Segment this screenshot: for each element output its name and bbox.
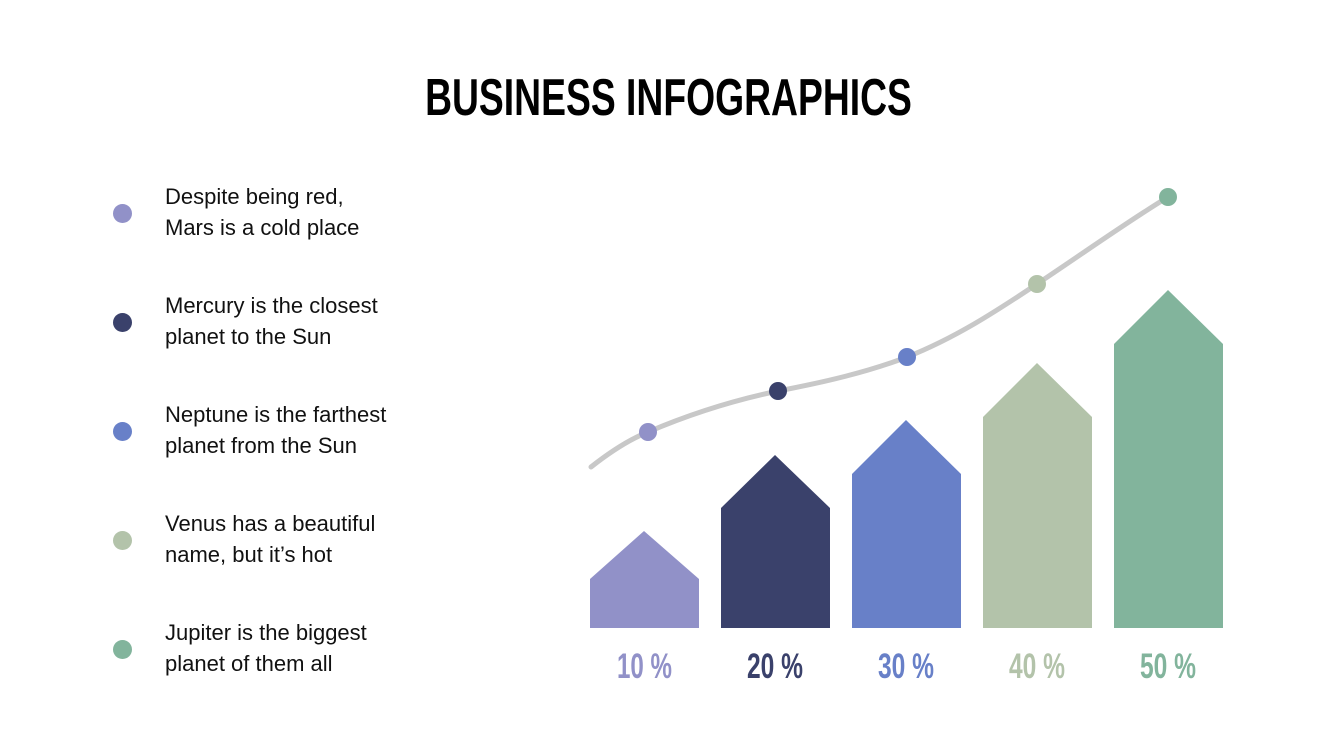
legend item: Jupiter: planet of them all <box>165 651 333 676</box>
arrow bar 30% <box>852 420 961 628</box>
legend item: Mercury <box>113 293 378 349</box>
legend item: Venus: name, but it’s hot <box>165 542 332 567</box>
arrow bar 10% <box>590 531 699 628</box>
legend item: Neptune: Neptune is the farthest <box>165 402 386 427</box>
trend curve <box>591 197 1168 467</box>
legend item: Jupiter: Jupiter is the biggest <box>165 620 367 645</box>
legend item: Mars: Despite being red, <box>165 184 344 209</box>
title: BUSINESS INFOGRAPHICS <box>425 69 911 127</box>
percentage labels: 50 % <box>1140 647 1196 686</box>
legend item: Mercury: Mercury is the closest <box>165 293 378 318</box>
legend item: Neptune: planet from the Sun <box>165 433 357 458</box>
legend item: Neptune <box>113 402 386 458</box>
arrow bar 50% <box>1114 290 1223 628</box>
legend item: Venus <box>113 511 375 567</box>
arrow bar 40% <box>983 363 1092 628</box>
percentage labels: 20 % <box>747 647 803 686</box>
percentage labels <box>617 647 1196 686</box>
arrow bar 20% <box>721 455 830 628</box>
percentage labels: 30 % <box>878 647 934 686</box>
legend item: Venus: Venus has a beautiful <box>165 511 375 536</box>
curve points <box>639 188 1177 441</box>
legend item: Mercury: planet to the Sun <box>165 324 331 349</box>
legend item: Jupiter <box>113 620 367 676</box>
percentage labels: 40 % <box>1009 647 1065 686</box>
legend item: Mars <box>113 184 359 240</box>
legend item: Mars: Mars is a cold place <box>165 215 359 240</box>
percentage labels: 10 % <box>617 647 672 686</box>
